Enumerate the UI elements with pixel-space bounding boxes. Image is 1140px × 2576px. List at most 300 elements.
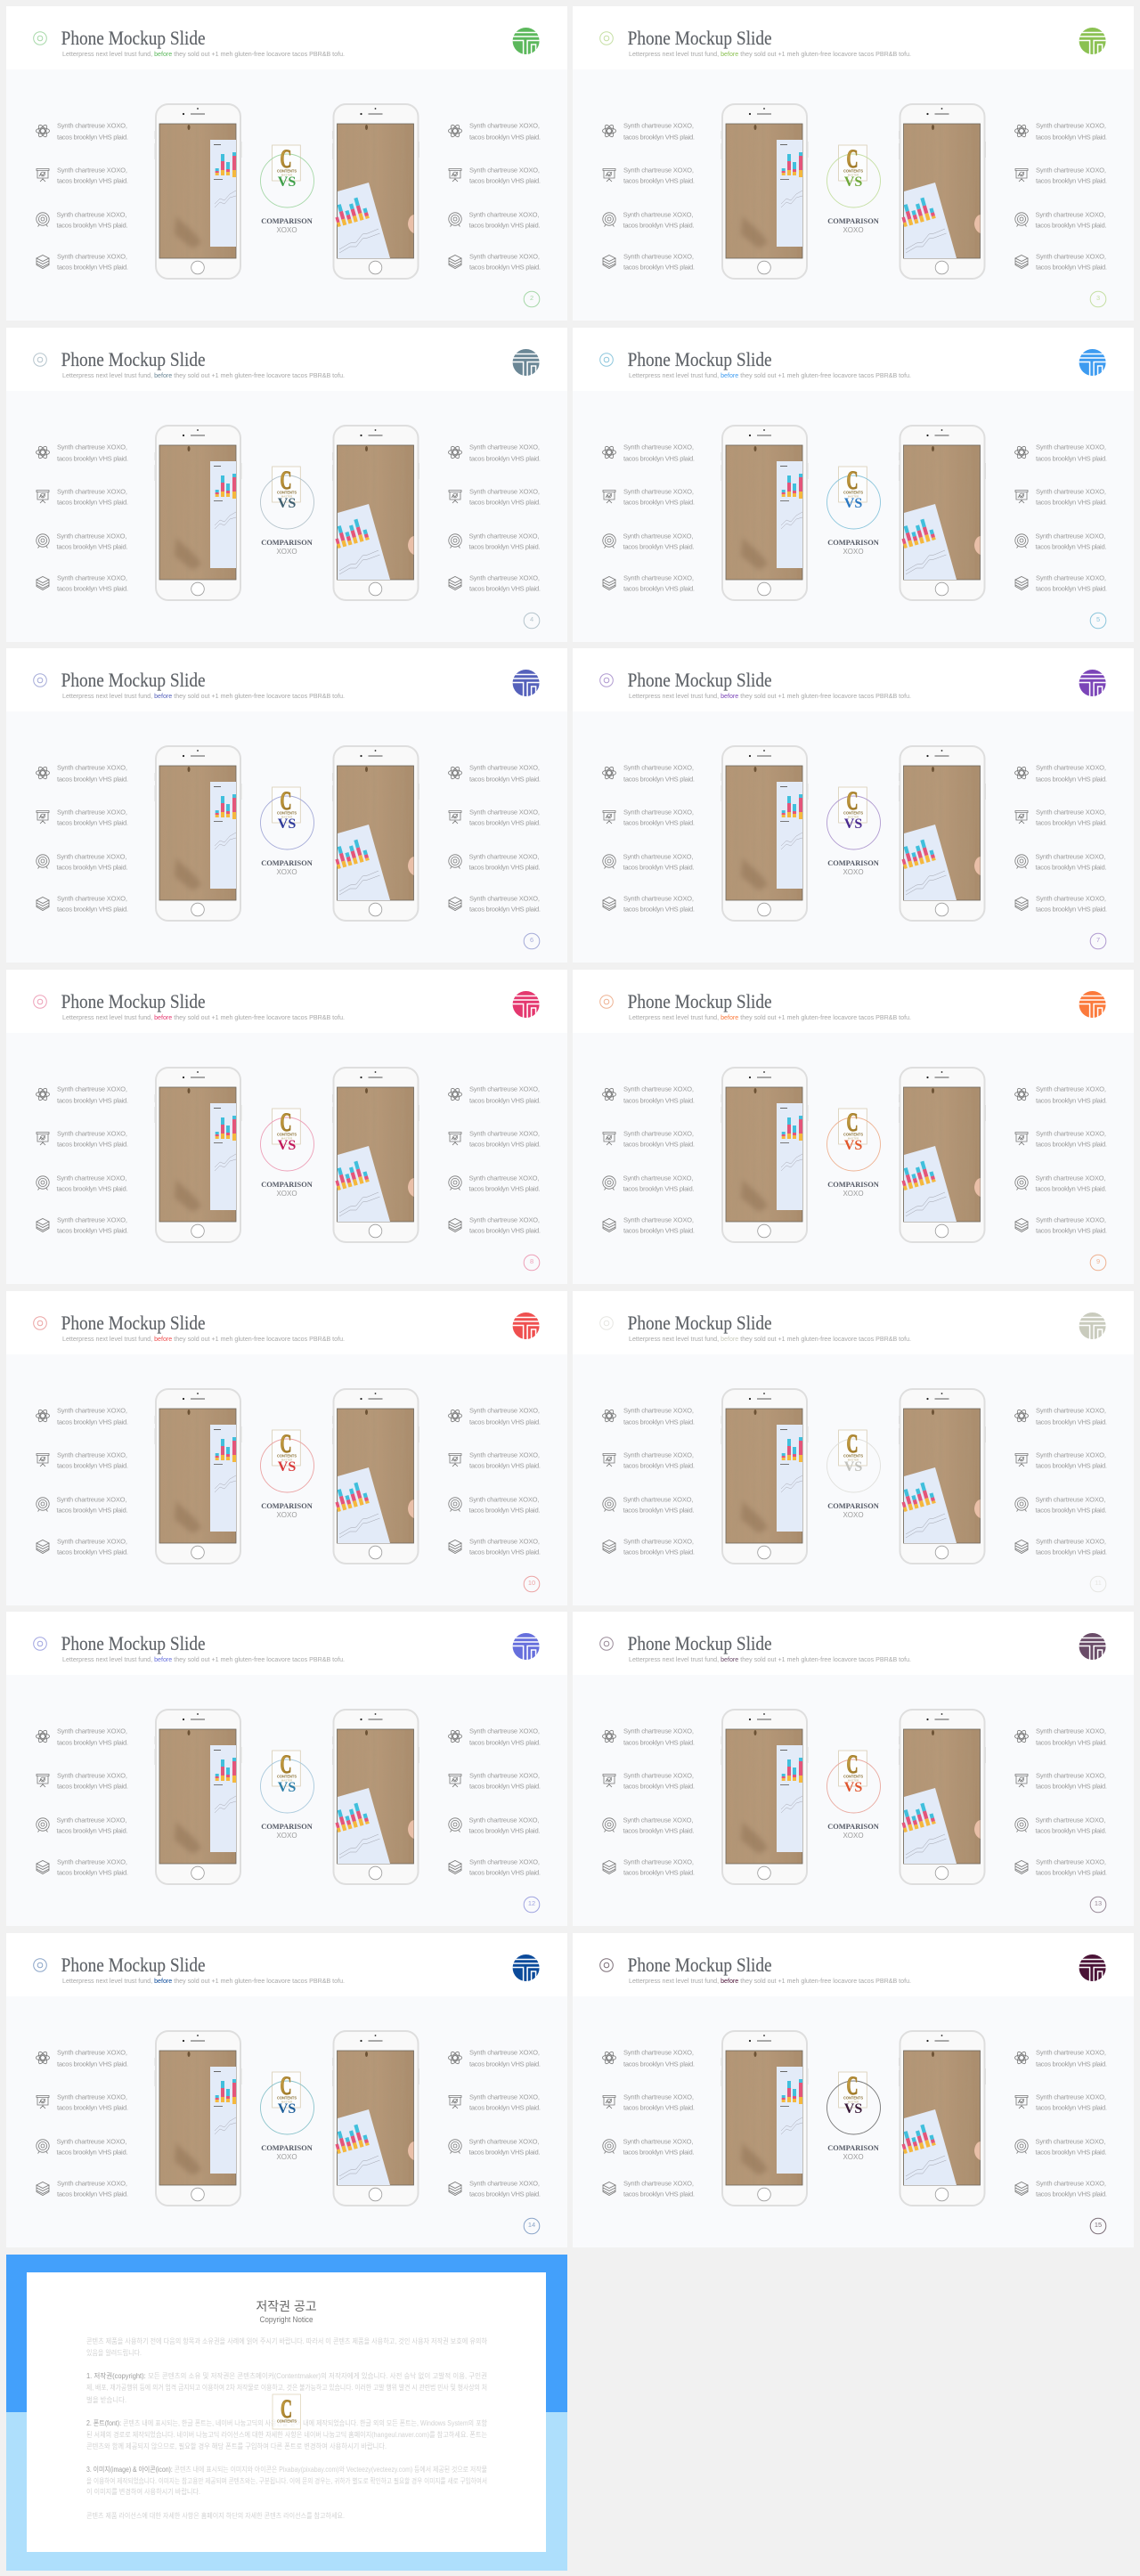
left feature list: tacos brooklyn VHS plaid. (57, 221, 128, 230)
left feature list: Synth chartreuse XOXO, (623, 764, 694, 771)
right feature list: Synth chartreuse XOXO, (1035, 853, 1106, 860)
comparison badge: XOXO (843, 868, 864, 876)
comparison badge: C (280, 786, 292, 816)
right feature list: tacos brooklyn VHS plaid. (469, 134, 541, 141)
page number (524, 1576, 540, 1592)
left feature list: Synth chartreuse XOXO, (623, 809, 694, 816)
left feature list: tacos brooklyn VHS plaid. (623, 1097, 695, 1104)
comparison badge: VS (278, 496, 296, 511)
left feature list: Synth chartreuse XOXO, (57, 1496, 126, 1503)
comparison badge: COMPARISON (261, 217, 313, 225)
left feature list: tacos brooklyn VHS plaid. (57, 864, 128, 871)
comparison badge: COMPARISON (261, 1181, 313, 1189)
left feature list: tacos brooklyn VHS plaid. (623, 2103, 695, 2112)
right feature list: tacos brooklyn VHS plaid. (469, 454, 541, 463)
heading: Phone Mockup Slide (628, 348, 772, 370)
subheading: Letterpress next level trust fund, before they sold out +1 meh gluten-free locavore tacos PBR&B tofu. (62, 371, 345, 379)
comparison badge: VS (278, 2101, 296, 2117)
left feature list: tacos brooklyn VHS plaid. (623, 1738, 695, 1747)
right feature list: Synth chartreuse XOXO, (1036, 443, 1106, 451)
slide background (573, 970, 1134, 1284)
icon: target (34, 1959, 46, 1971)
comparison badge (826, 1750, 880, 1840)
right feature list: tacos brooklyn VHS plaid. (1036, 1140, 1107, 1149)
right feature list: Synth chartreuse XOXO, (1035, 1496, 1106, 1503)
right feature list: Synth chartreuse XOXO, (1036, 764, 1106, 771)
left feature list: Synth chartreuse XOXO, (57, 1857, 127, 1866)
slide background (6, 970, 567, 1284)
notice body: 콘텐츠 제품 라이선스에 대한 자세한 사항은 홈페이지 하단의 자세한 콘텐츠 라이선스를 참고하세요. (86, 2511, 345, 2520)
right feature list: Synth chartreuse XOXO, (469, 1537, 540, 1546)
left phone (155, 2031, 242, 2206)
left feature list: Synth chartreuse XOXO, (57, 2180, 127, 2187)
comparison badge (260, 1750, 314, 1840)
comparison badge: C (846, 786, 859, 816)
left feature list: Synth chartreuse XOXO, (57, 2048, 127, 2057)
panel: slide 6 (6, 648, 567, 963)
right feature list: Synth chartreuse XOXO, (1036, 488, 1106, 495)
comparison badge: MASTER (848, 1779, 859, 1783)
left feature list: Synth chartreuse XOXO, (623, 1816, 693, 1824)
left feature list: Synth chartreuse XOXO, (57, 1407, 127, 1414)
left feature list: tacos brooklyn VHS plaid. (623, 1827, 695, 1834)
comparison badge (260, 1108, 314, 1198)
left phone (155, 1389, 242, 1564)
right phone (331, 426, 419, 600)
icon: target (34, 1317, 46, 1329)
right feature list (1015, 764, 1107, 914)
left feature list: Synth chartreuse XOXO, (623, 2180, 694, 2187)
icon: logo (513, 1954, 540, 1981)
page number (1090, 613, 1106, 629)
blue background (6, 2255, 567, 2571)
left feature list: tacos brooklyn VHS plaid. (57, 1868, 128, 1877)
page number: 15 (1095, 2221, 1102, 2229)
page number: 8 (530, 1257, 533, 1265)
left feature list: Synth chartreuse XOXO, (623, 1857, 694, 1866)
right feature list: Synth chartreuse XOXO, (469, 1727, 540, 1735)
comparison badge: MASTER (281, 1779, 292, 1783)
left feature list: Synth chartreuse XOXO, (57, 443, 127, 451)
comparison badge: C (846, 1750, 859, 1779)
left feature list: tacos brooklyn VHS plaid. (57, 134, 128, 141)
right feature list (1015, 1407, 1107, 1556)
comparison badge: C (846, 1429, 859, 1459)
left feature list: Synth chartreuse XOXO, (57, 532, 126, 540)
right feature list: Synth chartreuse XOXO, (1036, 894, 1106, 903)
right feature list (1015, 443, 1107, 593)
panel: slide 5 (573, 328, 1134, 642)
left feature list: Synth chartreuse XOXO, (623, 1496, 693, 1503)
comparison badge: CONTENTS (843, 810, 863, 816)
right feature list: Synth chartreuse XOXO, (469, 443, 540, 451)
page number: 5 (1096, 615, 1100, 623)
left phone (721, 2031, 809, 2206)
notice body: 제, 배포, 재가공행위 등에 의거 엄격 금지되고 이용하여 2차 저작물로 이용하고, 것은 불가능하고 있습니다. 이러한 고발 행위 발견 시 관련법 민사 및 형사상의 처 (86, 2383, 487, 2392)
left phone (155, 426, 242, 600)
comparison badge: VS (278, 175, 296, 190)
comparison badge: XOXO (276, 2153, 297, 2161)
left feature list: tacos brooklyn VHS plaid. (623, 1868, 695, 1877)
right feature list: Synth chartreuse XOXO, (1036, 253, 1106, 260)
slide background (573, 1612, 1134, 1926)
left phone (721, 1710, 809, 1884)
comparison badge: C (280, 144, 292, 174)
heading: Phone Mockup Slide (628, 1632, 772, 1654)
right feature list: tacos brooklyn VHS plaid. (469, 1738, 541, 1747)
comparison badge: XOXO (843, 1832, 864, 1840)
right feature list (449, 443, 541, 593)
left phone (155, 104, 242, 279)
left feature list: Synth chartreuse XOXO, (57, 1816, 126, 1824)
subheading: Letterpress next level trust fund, before they sold out +1 meh gluten-free locavore tacos PBR&B tofu. (629, 50, 911, 58)
right feature list (449, 764, 541, 914)
left feature list (36, 443, 128, 593)
page number (524, 1255, 540, 1271)
left feature list: tacos brooklyn VHS plaid. (623, 1140, 695, 1149)
comparison badge: MASTER (281, 2101, 292, 2103)
right feature list: tacos brooklyn VHS plaid. (1035, 1827, 1106, 1834)
comparison badge (826, 2071, 880, 2161)
comparison badge (260, 144, 314, 234)
left feature list: Synth chartreuse XOXO, (623, 1537, 694, 1546)
comparison badge: C (280, 1108, 292, 1137)
right feature list: Synth chartreuse XOXO, (1036, 121, 1106, 130)
heading: Phone Mockup Slide (628, 27, 772, 49)
left feature list: tacos brooklyn VHS plaid. (57, 2060, 128, 2068)
comparison badge (826, 1429, 880, 1519)
left feature list: tacos brooklyn VHS plaid. (623, 775, 695, 784)
left feature list: tacos brooklyn VHS plaid. (623, 264, 695, 271)
notice body: 벌을 받습니다. (86, 2395, 126, 2404)
slide background (573, 1291, 1134, 1605)
left feature list: Synth chartreuse XOXO, (623, 166, 694, 175)
left phone (721, 1068, 809, 1242)
left feature list: tacos brooklyn VHS plaid. (57, 2148, 128, 2157)
icon: logo (513, 1633, 540, 1660)
right feature list: tacos brooklyn VHS plaid. (469, 819, 541, 826)
left feature list: tacos brooklyn VHS plaid. (57, 1783, 128, 1790)
comparison badge: VS (844, 1459, 862, 1475)
right feature list (449, 2048, 541, 2198)
comparison badge: MASTER (848, 175, 859, 176)
comparison badge (826, 786, 880, 876)
notice body (86, 2336, 488, 2520)
comparison badge: C (280, 2071, 292, 2101)
left feature list: Synth chartreuse XOXO, (57, 210, 126, 219)
panel: slide 2 (6, 6, 567, 321)
left feature list (36, 121, 128, 271)
slide background (6, 1612, 567, 1926)
right feature list (449, 1407, 541, 1556)
left feature list: tacos brooklyn VHS plaid. (57, 1418, 128, 1426)
heading: Phone Mockup Slide (61, 1312, 206, 1334)
right feature list: tacos brooklyn VHS plaid. (469, 1097, 541, 1104)
notice body: 된 서체의 경로로 제작되었습니다. 네이버 나눔고딕 라이선스에 대한 자세한 사항은 네이버 나눔고딕 홈페이지(hangeul.naver.com)를 참고하세요. 폰트는 (86, 2430, 487, 2439)
left feature list: tacos brooklyn VHS plaid. (57, 454, 128, 463)
panel: slide 7 (573, 648, 1134, 963)
left feature list: Synth chartreuse XOXO, (623, 532, 693, 540)
left feature list: Synth chartreuse XOXO, (623, 1772, 694, 1779)
comparison badge: VS (278, 817, 296, 832)
subheading: Letterpress next level trust fund, before they sold out +1 meh gluten-free locavore tacos PBR&B tofu. (62, 1655, 345, 1663)
right feature list: tacos brooklyn VHS plaid. (468, 864, 540, 871)
right feature list: tacos brooklyn VHS plaid. (1036, 2190, 1107, 2198)
left feature list (36, 1407, 128, 1556)
right feature list: tacos brooklyn VHS plaid. (1036, 2060, 1107, 2068)
right feature list: tacos brooklyn VHS plaid. (469, 1418, 541, 1426)
left feature list: tacos brooklyn VHS plaid. (623, 499, 695, 506)
left feature list: Synth chartreuse XOXO, (623, 1407, 694, 1414)
right phone (331, 1389, 419, 1564)
icon: target (34, 1637, 46, 1650)
slide background (6, 1933, 567, 2247)
right phone (898, 1710, 986, 1884)
right feature list: Synth chartreuse XOXO, (1036, 166, 1106, 175)
subheading: Letterpress next level trust fund, before they sold out +1 meh gluten-free locavore tacos PBR&B tofu. (629, 1335, 911, 1343)
left feature list (36, 1727, 128, 1877)
left feature list: Synth chartreuse XOXO, (623, 2092, 694, 2101)
heading: Phone Mockup Slide (628, 990, 772, 1012)
left feature list: tacos brooklyn VHS plaid. (623, 1507, 695, 1514)
left feature list: tacos brooklyn VHS plaid. (57, 1507, 128, 1514)
right feature list: tacos brooklyn VHS plaid. (1035, 2148, 1106, 2157)
comparison badge: COMPARISON (827, 1181, 879, 1189)
comparison badge: VS (844, 817, 862, 832)
icon: target (600, 1637, 613, 1650)
subheading: Letterpress next level trust fund, before they sold out +1 meh gluten-free locavore tacos PBR&B tofu. (629, 1655, 911, 1663)
slide background (573, 6, 1134, 321)
heading: Phone Mockup Slide (628, 1954, 772, 1976)
subheading: Letterpress next level trust fund, before they sold out +1 meh gluten-free locavore tacos PBR&B tofu. (629, 692, 911, 700)
page number (1090, 2218, 1106, 2234)
right feature list: Synth chartreuse XOXO, (1036, 1727, 1106, 1735)
left feature list: tacos brooklyn VHS plaid. (57, 543, 128, 550)
right feature list: tacos brooklyn VHS plaid. (1036, 1783, 1107, 1790)
right feature list: Synth chartreuse XOXO, (469, 2048, 540, 2057)
comparison badge: CONTENTS (843, 1453, 863, 1459)
right feature list: Synth chartreuse XOXO, (1035, 210, 1106, 219)
right feature list: tacos brooklyn VHS plaid. (469, 584, 541, 593)
comparison badge: XOXO (843, 548, 864, 556)
comparison badge: VS (278, 1459, 296, 1475)
left feature list: tacos brooklyn VHS plaid. (57, 905, 128, 914)
panel: slide 8 (6, 970, 567, 1284)
right feature list: Synth chartreuse XOXO, (469, 1085, 540, 1093)
left phone (721, 1389, 809, 1564)
left feature list: Synth chartreuse XOXO, (57, 1772, 127, 1779)
comparison badge: MASTER (281, 495, 292, 499)
left feature list: tacos brooklyn VHS plaid. (623, 2148, 695, 2157)
right feature list: tacos brooklyn VHS plaid. (469, 1227, 541, 1234)
panel: slide 4 (6, 328, 567, 642)
right feature list: Synth chartreuse XOXO, (469, 1129, 540, 1138)
right feature list: Synth chartreuse XOXO, (1036, 1216, 1106, 1223)
icon: logo (513, 28, 540, 54)
comparison badge: XOXO (276, 868, 297, 876)
left feature list: tacos brooklyn VHS plaid. (57, 1548, 128, 1556)
left feature list: Synth chartreuse XOXO, (57, 809, 127, 816)
right feature list: tacos brooklyn VHS plaid. (469, 1548, 541, 1556)
comparison badge: MASTER (281, 816, 292, 819)
panel: slide 9 (573, 970, 1134, 1284)
comparison badge (826, 144, 880, 234)
right feature list: Synth chartreuse XOXO, (1036, 573, 1106, 582)
right feature list (449, 1727, 541, 1877)
comparison badge: MASTER (848, 1138, 859, 1140)
heading: Phone Mockup Slide (628, 669, 772, 691)
left feature list: tacos brooklyn VHS plaid. (57, 775, 128, 784)
left feature list: Synth chartreuse XOXO, (57, 1174, 126, 1182)
comparison badge: COMPARISON (827, 1502, 879, 1510)
comparison badge: COMPARISON (827, 859, 879, 867)
panel: slide 15 (573, 1933, 1134, 2247)
page number: 4 (530, 615, 533, 623)
left phone (155, 1710, 242, 1884)
right phone (898, 1068, 986, 1242)
page number: 14 (528, 2221, 535, 2229)
comparison badge: COMPARISON (827, 217, 879, 225)
right feature list: tacos brooklyn VHS plaid. (1036, 134, 1107, 141)
right feature list: Synth chartreuse XOXO, (1035, 532, 1106, 540)
right feature list: tacos brooklyn VHS plaid. (1036, 1097, 1107, 1104)
right feature list: tacos brooklyn VHS plaid. (469, 176, 541, 185)
right feature list: tacos brooklyn VHS plaid. (469, 2060, 541, 2068)
comparison badge: XOXO (276, 1832, 297, 1840)
right feature list: Synth chartreuse XOXO, (469, 573, 540, 582)
notice subheading: Copyright Notice (260, 2315, 314, 2324)
right feature list: tacos brooklyn VHS plaid. (1036, 905, 1107, 914)
icon: target (600, 674, 613, 687)
right feature list: tacos brooklyn VHS plaid. (1036, 584, 1107, 593)
right feature list: tacos brooklyn VHS plaid. (1036, 1418, 1107, 1426)
left phone (721, 104, 809, 279)
right feature list: tacos brooklyn VHS plaid. (1036, 1462, 1107, 1469)
left feature list (602, 443, 695, 593)
icon: logo (513, 670, 540, 696)
right feature list: Synth chartreuse XOXO, (469, 764, 540, 771)
right feature list: tacos brooklyn VHS plaid. (1036, 499, 1107, 506)
comparison badge: VS (844, 175, 862, 190)
right feature list: tacos brooklyn VHS plaid. (1036, 1227, 1107, 1234)
right feature list: tacos brooklyn VHS plaid. (1035, 221, 1106, 230)
left feature list (602, 2048, 695, 2198)
watermark logo (273, 2394, 301, 2429)
comparison badge: CONTENTS (843, 2096, 863, 2100)
comparison badge: CONTENTS (277, 1133, 297, 1136)
slide background (573, 648, 1134, 963)
subheading: Letterpress next level trust fund, before they sold out +1 meh gluten-free locavore tacos PBR&B tofu. (62, 50, 345, 58)
left feature list: tacos brooklyn VHS plaid. (57, 1738, 128, 1747)
left feature list: Synth chartreuse XOXO, (623, 2137, 693, 2146)
comparison badge: CONTENTS (843, 169, 863, 173)
left feature list: tacos brooklyn VHS plaid. (623, 543, 695, 550)
left feature list (36, 1085, 128, 1234)
comparison badge: VS (844, 1138, 862, 1153)
left phone (721, 426, 809, 600)
left feature list: tacos brooklyn VHS plaid. (57, 1227, 128, 1234)
left feature list: Synth chartreuse XOXO, (57, 1727, 127, 1735)
left feature list: tacos brooklyn VHS plaid. (57, 2190, 128, 2198)
right feature list: tacos brooklyn VHS plaid. (1035, 543, 1106, 550)
comparison badge: MASTER (848, 1459, 859, 1462)
left feature list: Synth chartreuse XOXO, (623, 210, 693, 219)
icon: target (34, 674, 46, 687)
right feature list: Synth chartreuse XOXO, (1036, 1451, 1106, 1459)
left phone (721, 746, 809, 921)
right feature list: Synth chartreuse XOXO, (1036, 1857, 1106, 1866)
notice body: 있음을 알려드립니다. (86, 2348, 142, 2357)
right feature list: tacos brooklyn VHS plaid. (469, 1868, 541, 1877)
left feature list: tacos brooklyn VHS plaid. (623, 864, 695, 871)
right feature list (1015, 2048, 1107, 2198)
comparison badge: COMPARISON (261, 1502, 313, 1510)
left feature list: Synth chartreuse XOXO, (57, 1216, 127, 1223)
right phone (898, 1389, 986, 1564)
heading: Phone Mockup Slide (61, 1632, 206, 1654)
comparison badge: CONTENTS (277, 2096, 297, 2100)
left feature list: tacos brooklyn VHS plaid. (623, 905, 695, 914)
right feature list: tacos brooklyn VHS plaid. (469, 2103, 541, 2112)
right feature list: Synth chartreuse XOXO, (469, 1216, 540, 1223)
comparison badge: XOXO (276, 1190, 297, 1198)
icon: target (600, 1317, 613, 1329)
right feature list: Synth chartreuse XOXO, (469, 1451, 540, 1459)
comparison badge: MASTER (848, 495, 859, 499)
comparison badge: CONTENTS (843, 1774, 863, 1779)
icon: logo (1079, 1312, 1106, 1339)
left feature list: tacos brooklyn VHS plaid. (623, 2190, 695, 2198)
left feature list: Synth chartreuse XOXO, (623, 1085, 694, 1093)
right feature list (1015, 1085, 1107, 1234)
subheading: Letterpress next level trust fund, before they sold out +1 meh gluten-free locavore tacos PBR&B tofu. (62, 1013, 345, 1021)
left feature list: tacos brooklyn VHS plaid. (623, 584, 695, 593)
comparison badge: MASTER (848, 816, 859, 819)
right feature list: Synth chartreuse XOXO, (468, 210, 540, 219)
subheading: Letterpress next level trust fund, before they sold out +1 meh gluten-free locavore tacos PBR&B tofu. (62, 1335, 345, 1343)
icon: target (600, 32, 613, 45)
left feature list (36, 764, 128, 914)
left feature list: Synth chartreuse XOXO, (623, 121, 694, 130)
slide background (573, 1933, 1134, 2247)
subheading: Letterpress next level trust fund, before they sold out +1 meh gluten-free locavore tacos PBR&B tofu. (629, 1013, 911, 1021)
icon: target (600, 1959, 613, 1971)
right feature list: Synth chartreuse XOXO, (468, 2137, 540, 2146)
comparison badge: CONTENTS (277, 810, 297, 816)
left feature list: Synth chartreuse XOXO, (57, 166, 127, 175)
comparison badge: MASTER (281, 1459, 292, 1462)
left feature list: tacos brooklyn VHS plaid. (623, 1227, 695, 1234)
comparison badge: COMPARISON (827, 539, 879, 547)
left feature list: Synth chartreuse XOXO, (623, 488, 694, 495)
white card (27, 2272, 546, 2552)
watermark logo: CONTENTS (277, 2418, 297, 2424)
left phone (155, 1068, 242, 1242)
right feature list: Synth chartreuse XOXO, (1036, 2048, 1106, 2057)
page number: 11 (1095, 1579, 1102, 1587)
comparison badge: VS (278, 1138, 296, 1153)
right phone (331, 1710, 419, 1884)
left feature list: tacos brooklyn VHS plaid. (57, 264, 128, 271)
comparison badge (826, 466, 880, 556)
icon: logo (1079, 1633, 1106, 1660)
right feature list: Synth chartreuse XOXO, (1036, 2180, 1106, 2187)
left feature list: Synth chartreuse XOXO, (57, 894, 127, 903)
left feature list: Synth chartreuse XOXO, (623, 2048, 694, 2057)
panel: slide 3 (573, 6, 1134, 321)
left feature list: Synth chartreuse XOXO, (57, 2092, 127, 2101)
icon: target (600, 353, 613, 366)
